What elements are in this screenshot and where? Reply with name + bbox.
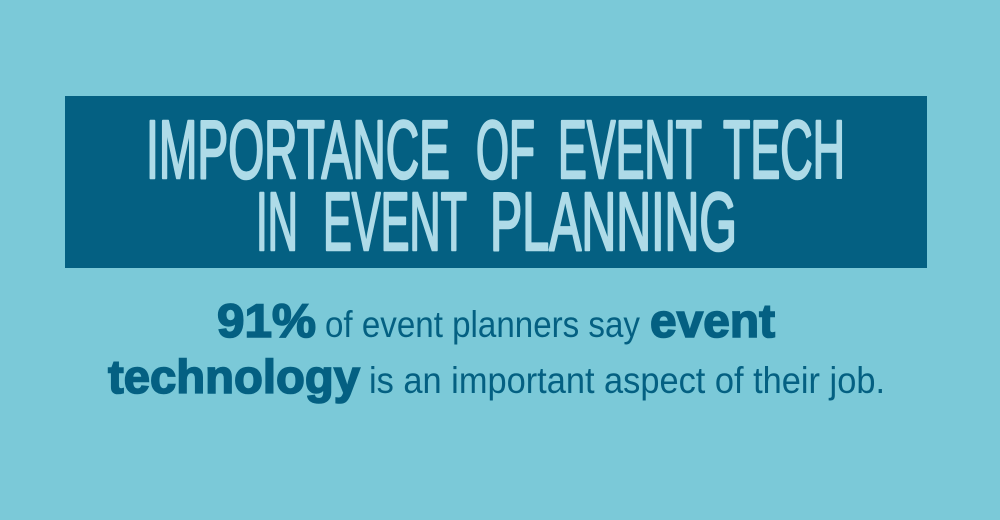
text: is an important aspect of their job.: is an important aspect of their job. (369, 360, 885, 401)
heading: title line 2: IN (256, 175, 298, 268)
heading: title line 2: EVENT (323, 175, 467, 268)
heading: title line 2: PLANNING (490, 175, 737, 268)
panel: title banner (65, 96, 927, 268)
emphasis: event: event (650, 294, 775, 347)
heading: title line 1: TECH (723, 103, 845, 196)
text: of event planners say: of event planners say (325, 304, 640, 345)
heading: title line 1: IMPORTANCE (146, 103, 450, 196)
statistic: 91%: 91% (217, 294, 316, 347)
heading: title line 1: OF (476, 103, 535, 196)
heading: title line 1: EVENT (558, 103, 702, 196)
heading: title line 2 (256, 175, 737, 268)
text block: statistic statement (108, 294, 885, 403)
emphasis: technology: technology (108, 350, 360, 403)
